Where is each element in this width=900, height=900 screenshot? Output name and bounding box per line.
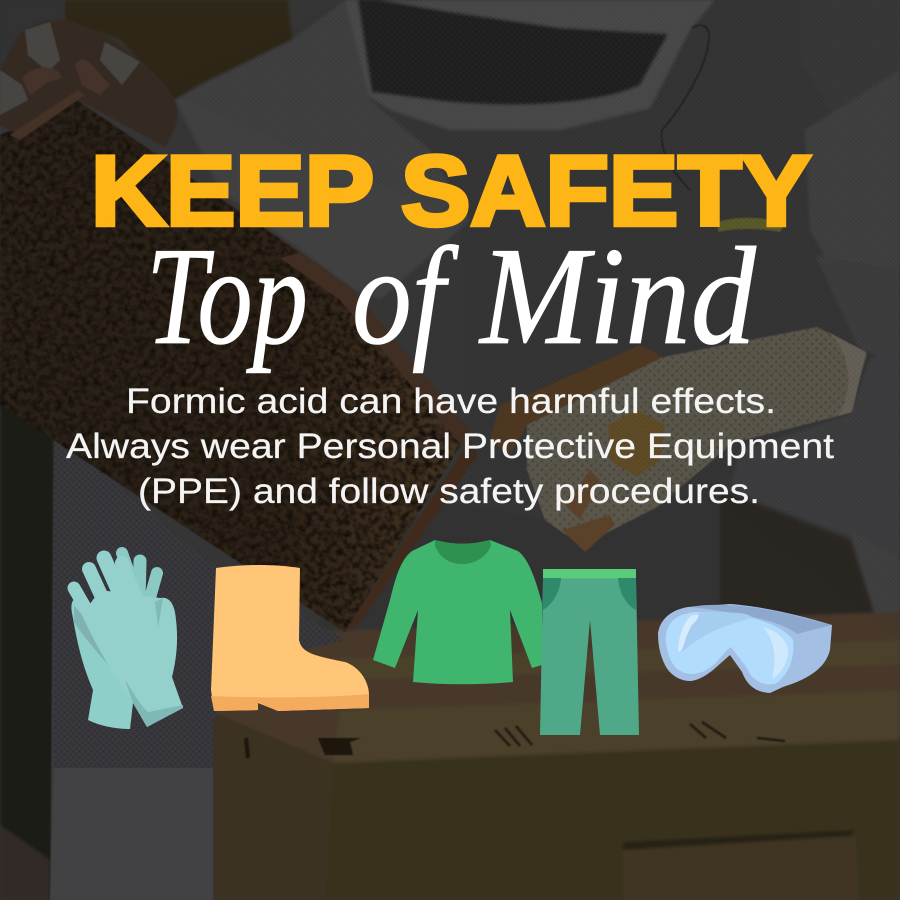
title: Top of Mind script <box>146 219 757 374</box>
shirt collar <box>435 540 491 564</box>
title: Top of Mind script: Top <box>146 219 308 374</box>
icon: safety goggles <box>658 604 832 693</box>
icon: long-sleeve shirt <box>373 540 542 684</box>
icon: gloves <box>71 553 183 729</box>
body text: PPE safety message <box>66 382 834 511</box>
body text: PPE safety message: (PPE) and follow safety procedures. <box>138 472 760 511</box>
body text: PPE safety message: Always wear Personal Protective Equipment <box>66 427 834 466</box>
pants pockets <box>543 578 636 610</box>
title: Top of Mind script: of <box>352 219 460 374</box>
pants waistband <box>543 569 636 578</box>
icon: rubber boot <box>211 565 369 711</box>
title: KEEP SAFETY: KEEP SAFETY <box>91 135 811 246</box>
icon: work pants <box>540 569 639 735</box>
body text: PPE safety message: Formic acid can have harmful effects. <box>126 382 776 421</box>
title: Top of Mind script: Mind <box>478 219 757 374</box>
glove hexagon logo <box>608 410 665 477</box>
